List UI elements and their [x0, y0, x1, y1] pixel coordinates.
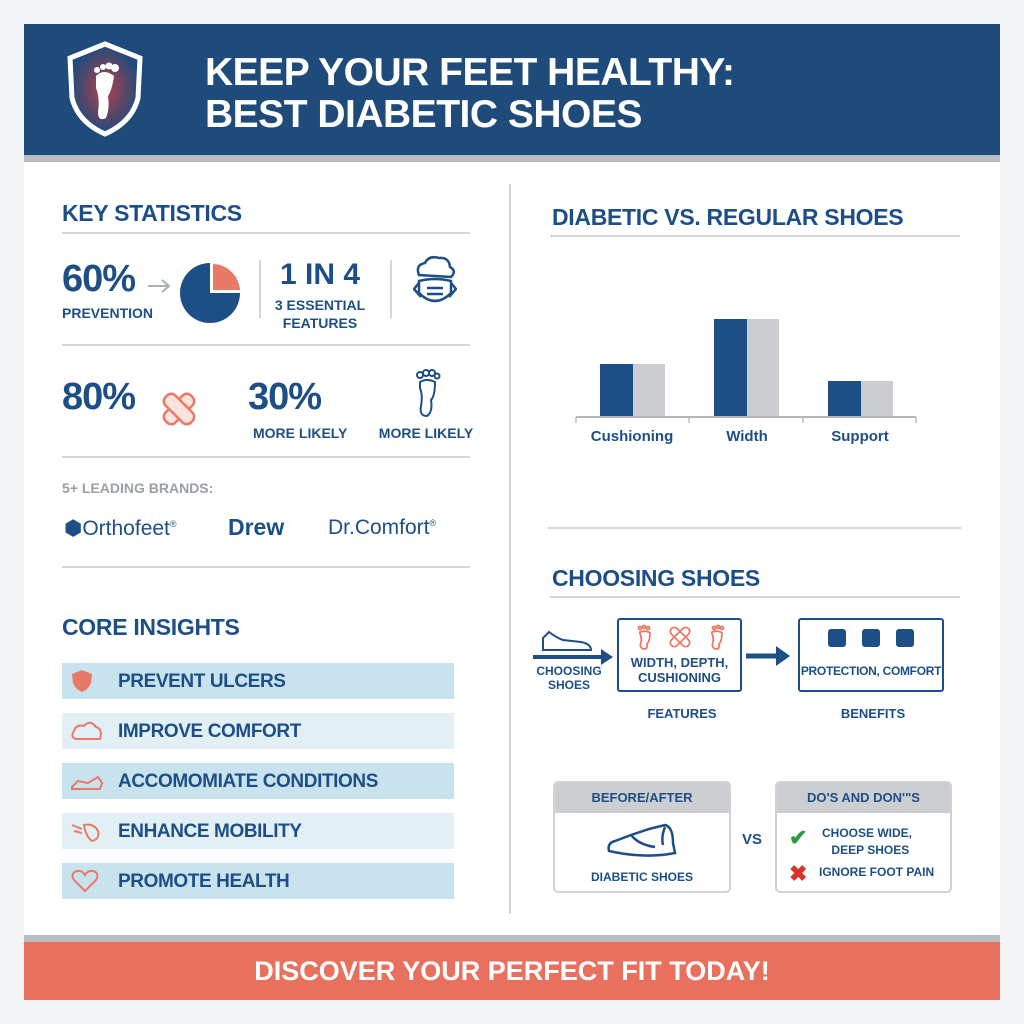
insight: accommodate: [62, 763, 454, 799]
insight: promote health: PROMOTE HEALTH: [118, 871, 289, 892]
header: [24, 24, 1000, 155]
panel: dos and donts: ✖: [789, 861, 807, 886]
heading: diabetic vs regular: DIABETIC VS. REGULAR SHOES: [552, 204, 903, 230]
panel: before/after: DIABETIC SHOES: [591, 870, 693, 884]
panel: dos and donts: IGNORE FOOT PAIN: [819, 865, 934, 879]
stat 30%: MORE LIKELY: [253, 425, 347, 441]
panel: dos and donts: DEEP SHOES: [831, 843, 909, 857]
insight: prevent ulcers: PREVENT ULCERS: [118, 671, 286, 692]
stat 30%: [248, 376, 347, 441]
label: benefits: BENEFITS: [841, 706, 905, 721]
icon: bandage: [162, 392, 196, 426]
heading: choosing shoes: CHOOSING SHOES: [552, 565, 760, 591]
icon: foot outline: MORE LIKELY: [379, 425, 473, 441]
insight: improve comfort: IMPROVE COMFORT: [118, 721, 301, 742]
panel: before/after: BEFORE/AFTER: [591, 790, 693, 805]
title: KEEP YOUR FEET HEALTHY:: [205, 51, 735, 94]
flow: choosing shoes: [533, 630, 613, 692]
title: [205, 51, 735, 136]
flow: choosing shoes: CHOOSING: [536, 664, 602, 678]
flow: choosing shoes: SHOES: [548, 678, 590, 692]
stat 80%: 80%: [62, 376, 135, 418]
brand logos: [64, 514, 436, 540]
heading: key statistics: KEY STATISTICS: [62, 200, 242, 226]
brands label: 5+ LEADING BRANDS:: [62, 480, 213, 496]
insight: improve comfort: [62, 713, 454, 749]
stat 60%: PREVENTION: [62, 305, 153, 321]
stat 1 in 4: 3 ESSENTIAL: [275, 297, 365, 313]
arrow: [746, 646, 790, 666]
box: benefits: [798, 618, 944, 692]
footer banner: [24, 942, 1000, 1000]
text: vs: VS: [742, 831, 762, 848]
title: BEST DIABETIC SHOES: [205, 93, 642, 136]
icon: shield foot: [67, 41, 143, 137]
insight: prevent ulcers: [62, 663, 454, 699]
heading: core insights: CORE INSIGHTS: [62, 614, 240, 640]
icon: arrow and pie: [148, 263, 240, 323]
insight: mobility: [62, 813, 454, 849]
brand logos: Dr.Comfort®: [328, 516, 436, 539]
insight: accommodate: ACCOMOMIATE CONDITIONS: [118, 771, 378, 792]
brand logos: Drew: [228, 514, 284, 540]
bar chart: Width: [726, 428, 768, 445]
box: features: [617, 618, 742, 692]
panel: dos and donts: ✔: [789, 825, 807, 850]
label: features: FEATURES: [647, 706, 717, 721]
stat 1 in 4: [275, 258, 365, 331]
panel: dos and donts: DO'S AND DON'"S: [807, 790, 920, 805]
panel: dos and donts: [775, 781, 952, 893]
brand logos: ⬢Orthofeet®: [64, 517, 177, 540]
main card: [24, 162, 1000, 935]
insight: mobility: ENHANCE MOBILITY: [118, 821, 302, 842]
panel: before/after: [553, 781, 731, 893]
box: benefits: PROTECTION, COMFORT: [801, 664, 941, 678]
footer banner: DISCOVER YOUR PERFECT FIT TODAY!: [254, 956, 770, 986]
box: features: CUSHIONING: [638, 670, 721, 685]
box: features: WIDTH, DEPTH,: [631, 655, 728, 670]
stat 1 in 4: 1 IN 4: [280, 258, 360, 291]
stat 60%: 60%: [62, 258, 135, 300]
insight: promote health: [62, 863, 454, 899]
stat 1 in 4: FEATURES: [283, 315, 357, 331]
icon: mask cloud: [413, 256, 457, 302]
bar chart: Support: [831, 428, 889, 445]
stat 60%: [62, 258, 153, 321]
stat 30%: 30%: [248, 376, 321, 418]
bar chart: [576, 319, 916, 445]
bar chart: Cushioning: [591, 428, 673, 445]
panel: dos and donts: CHOOSE WIDE,: [822, 826, 912, 840]
icon: foot outline: [379, 369, 473, 441]
